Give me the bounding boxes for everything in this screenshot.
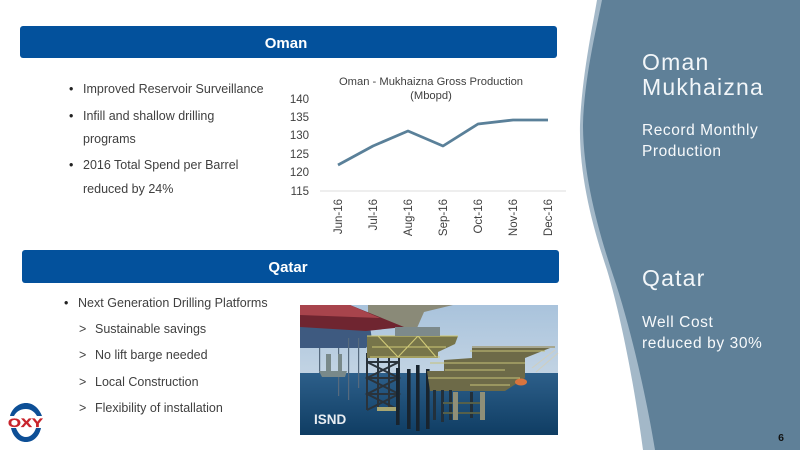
distant rig: [319, 354, 347, 377]
text block: Oman bullets: programs: [83, 132, 136, 146]
side panel: highlights: [580, 0, 800, 450]
heading: Mukhaizna: Mukhaizna: [642, 74, 764, 100]
line chart: Oman Mukhaizna Gross Production: Oman - Mukhaizna Gross Production: [339, 76, 523, 88]
text block: Oman bullets: •: [69, 109, 73, 123]
header bar: Qatar: Qatar: [268, 259, 308, 276]
line chart: Oman Mukhaizna Gross Production: 115: [291, 186, 309, 198]
text block: Qatar bullets: •: [64, 296, 68, 310]
heading: Oman Mukhaizna: Oman: [642, 49, 709, 75]
text: Well Cost reduced by 30%: reduced by 30%: [642, 335, 762, 352]
text block: Oman bullets: 2016 Total Spend per Barrel: [83, 158, 238, 172]
line chart: Oman Mukhaizna Gross Production: Nov-16: [508, 199, 520, 236]
text block: Qatar bullets: No lift barge needed: [95, 348, 208, 362]
line chart: Oman Mukhaizna Gross Production: 130: [290, 130, 309, 142]
text block: Oman bullets: reduced by 24%: [83, 182, 173, 196]
text block: Qatar bullets: Next Generation Drilling Platforms: [78, 296, 268, 310]
heading: Qatar: Qatar: [642, 265, 706, 291]
line chart: Oman Mukhaizna Gross Production: Sep-16: [438, 199, 450, 236]
left topsides: [367, 336, 458, 358]
line chart: Oman Mukhaizna Gross Production: 125: [290, 149, 309, 161]
text block: Oman bullets: •: [69, 158, 73, 172]
line chart: Oman Mukhaizna Gross Production: [290, 76, 566, 236]
text block: Qatar bullets: >: [79, 322, 86, 336]
text block: Qatar bullets: Sustainable savings: [95, 322, 206, 336]
line chart: Oman Mukhaizna Gross Production: Jun-16: [333, 199, 345, 234]
line chart: Oman Mukhaizna Gross Production: (Mbopd): [410, 90, 452, 102]
header bar: Oman: Oman: [265, 35, 307, 52]
page number: 6: [778, 432, 784, 444]
photo: ISND offshore platform: [300, 305, 558, 435]
right jacket: [433, 390, 473, 422]
text: Record Monthly Production: Record Monthly: [642, 122, 758, 139]
text block: Qatar bullets: Flexibility of installation: [95, 401, 223, 415]
text block: Qatar bullets: >: [79, 348, 86, 362]
line chart: Oman Mukhaizna Gross Production: 140: [290, 94, 309, 106]
rig top deck: [368, 305, 453, 328]
photo label: ISND: ISND: [314, 412, 347, 427]
text block: Oman bullets: •: [69, 82, 73, 96]
line chart: Oman Mukhaizna Gross Production: 135: [290, 112, 309, 124]
piles: [396, 365, 430, 431]
logo: OXY: [8, 403, 43, 442]
text block: Qatar bullets: [64, 296, 268, 415]
header bar: Qatar: [22, 250, 559, 283]
text block: Qatar bullets: >: [79, 375, 86, 389]
left jacket: [367, 353, 399, 410]
text: Well Cost reduced by 30%: Well Cost: [642, 314, 714, 331]
text block: Oman bullets: Improved Reservoir Surveillance: [83, 82, 264, 96]
text block: Oman bullets: Infill and shallow drilling: [83, 109, 214, 123]
logo: OXY: OXY: [8, 418, 43, 430]
line chart: Oman Mukhaizna Gross Production: Dec-16: [543, 199, 555, 236]
text: Record Monthly Production: Production: [642, 143, 722, 160]
header bar: Oman: [20, 26, 557, 58]
text block: Oman bullets: [69, 82, 264, 196]
text block: Qatar bullets: >: [79, 401, 86, 415]
line chart: Oman Mukhaizna Gross Production: 120: [290, 167, 309, 179]
text block: Qatar bullets: Local Construction: [95, 375, 199, 389]
line chart: Oman Mukhaizna Gross Production: Jul-16: [368, 199, 380, 230]
line chart: Oman Mukhaizna Gross Production: Aug-16: [403, 199, 415, 236]
line chart: Oman Mukhaizna Gross Production: Oct-16: [473, 199, 485, 234]
rig underside: [300, 326, 372, 348]
right topsides: [427, 346, 555, 391]
